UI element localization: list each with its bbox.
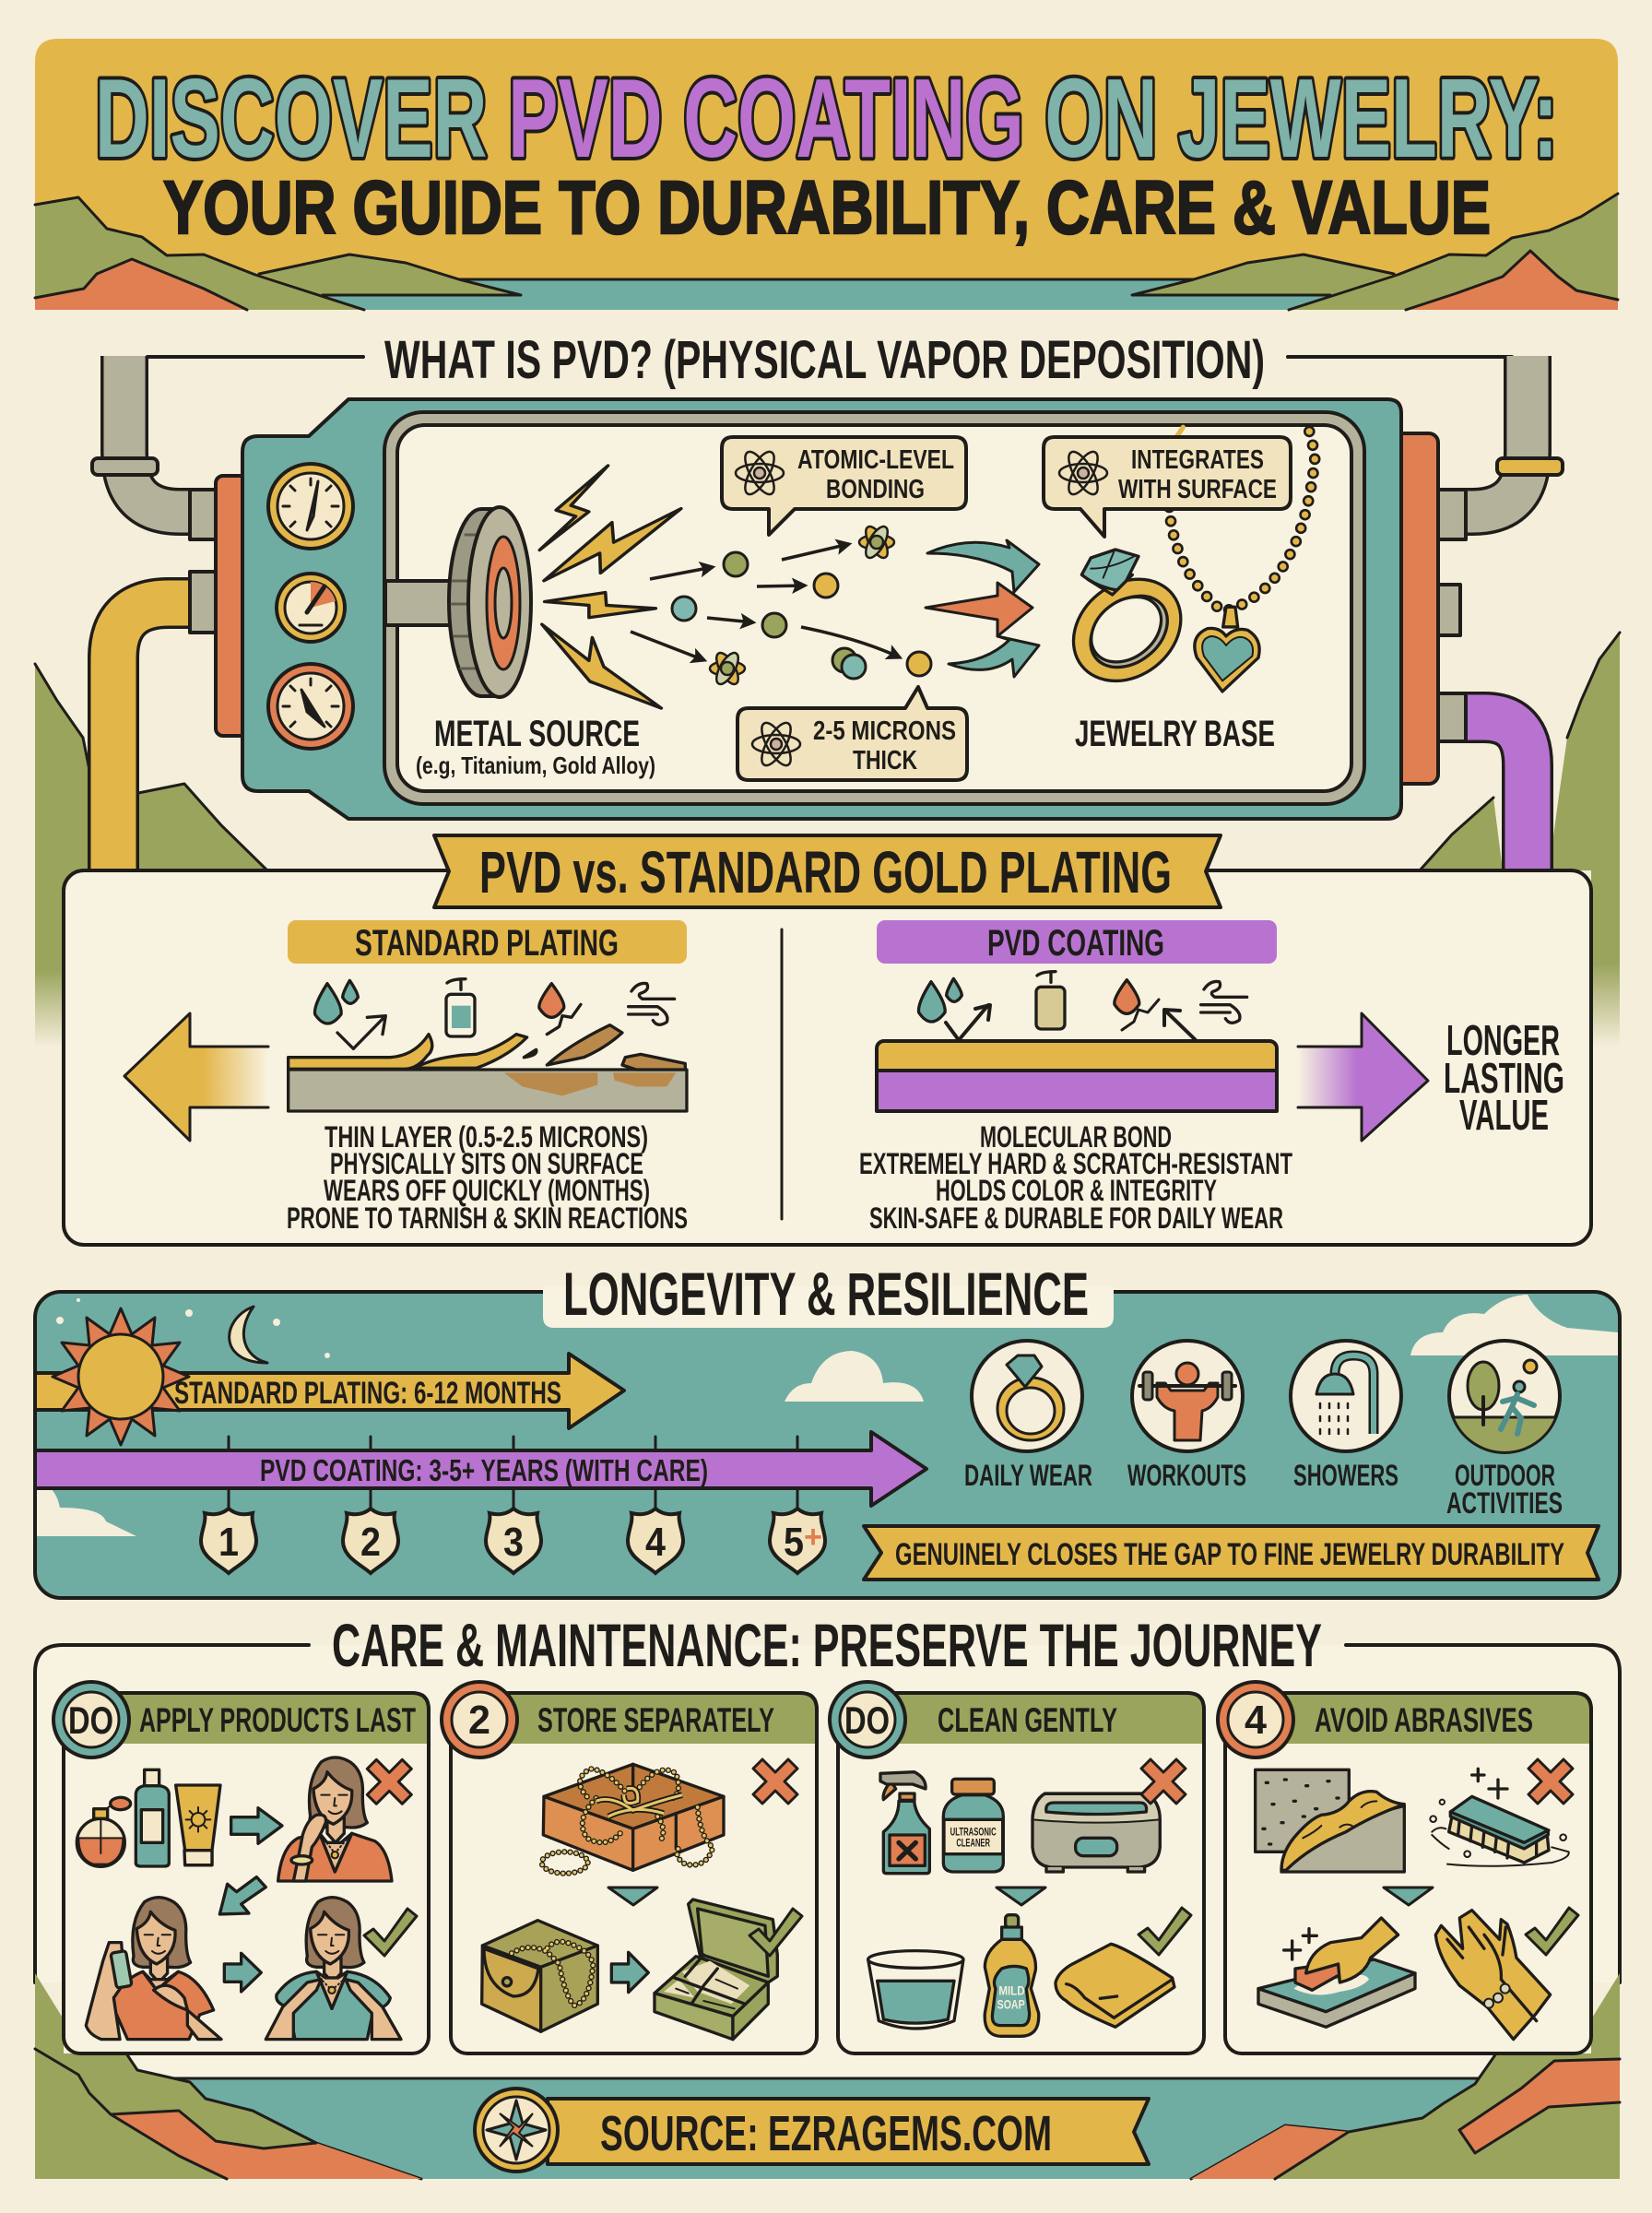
perfume bottle [77, 1797, 131, 1866]
source ribbon: SOURCE: EZRAGEMS.COM [600, 2106, 1052, 2161]
label: APPLY PRODUCTS LAST [139, 1701, 416, 1739]
gem ring [1054, 550, 1201, 702]
standard plating pill: STANDARD PLATING [355, 923, 619, 964]
left gray pipe [92, 356, 218, 512]
badge: DO [68, 1698, 113, 1742]
gauge 1 [268, 464, 353, 549]
longer lasting value [1444, 1016, 1564, 1139]
callout: atomic-level bonding [722, 437, 966, 535]
PVD exposure icons [918, 972, 1247, 1040]
lightning bolts [539, 466, 681, 708]
header band [1225, 1693, 1591, 1744]
jewelry base label: JEWELRY BASE [1075, 714, 1275, 754]
heading tab [543, 1260, 1114, 1328]
PVD coating list [859, 1120, 1292, 1235]
glass of water [868, 1951, 963, 2029]
badge [53, 1682, 129, 1757]
x mark [1141, 1759, 1186, 1804]
standard plating list: PRONE TO TARNISH & SKIN REACTIONS [287, 1201, 688, 1235]
cleaning cloth [1056, 1944, 1174, 2027]
icon labels [964, 1459, 1563, 1520]
bottom landscape [35, 1973, 1620, 2179]
mild soap bottle: MILD [998, 1982, 1025, 1997]
gauge 2 [277, 574, 345, 642]
card 4: avoid abrasives [1218, 1682, 1591, 2053]
triangle pointer [1384, 1888, 1433, 1905]
card 1: apply products last [53, 1682, 429, 2053]
pouch [482, 1921, 597, 2031]
compartment jewelry box [655, 1899, 777, 2040]
badge [1218, 1682, 1293, 1757]
sun [53, 1308, 189, 1445]
callout: integrates with surface: WITH SURFACE [1118, 475, 1277, 504]
left fading arrow [124, 1013, 268, 1141]
standard plating timeline arrow [35, 1354, 624, 1428]
ultrasonic machine [1032, 1793, 1160, 1872]
longer lasting value: LASTING [1444, 1054, 1564, 1102]
gloved hand [1306, 1918, 1398, 1982]
card 3: clean gently [830, 1682, 1204, 2053]
card 2: store separately [442, 1682, 817, 2053]
spray bottle [136, 1769, 169, 1866]
badge [830, 1682, 905, 1757]
yellow pipe [113, 603, 218, 872]
ribbon heading: PVD vs. STANDARD GOLD PLATING [479, 839, 1172, 905]
particle stream [631, 524, 931, 687]
callout: atomic-level bonding: ATOMIC-LEVEL [797, 445, 954, 475]
standard layer diagram [289, 1025, 687, 1111]
standard plating list: THIN LAYER (0.5-2.5 MICRONS) [324, 1120, 648, 1154]
sparkles [1284, 1929, 1316, 1959]
icon labels: WORKOUTS [1127, 1459, 1246, 1492]
ultrasonic cleaner bottle: ULTRASONIC [950, 1826, 997, 1839]
necklace [1169, 427, 1316, 692]
year shields: 1 [218, 1520, 239, 1565]
header banner [35, 39, 1618, 310]
heading tab: LONGEVITY & RESILIENCE [563, 1260, 1089, 1328]
PVD layer diagram [877, 1041, 1277, 1111]
heart pendant [1195, 607, 1259, 692]
label: CLEAN GENTLY [938, 1701, 1117, 1739]
icon labels: OUTDOOR [1455, 1459, 1555, 1492]
mild soap bottle: SOAP [997, 1996, 1025, 2011]
ribbon heading [434, 835, 1221, 907]
check mark [364, 1909, 417, 1956]
PVD coating list: SKIN-SAFE & DURABLE FOR DAILY WEAR [869, 1201, 1283, 1235]
arrow [224, 1953, 261, 1992]
year shields: 3 [503, 1520, 524, 1565]
year shields: + [804, 1520, 822, 1555]
PVD coating pill [877, 920, 1277, 964]
illustrations [1256, 1769, 1569, 2040]
check mark [1139, 1908, 1191, 1955]
icon labels: ACTIVITIES [1446, 1486, 1563, 1520]
year shields: 5 [784, 1520, 804, 1565]
check mark [749, 1909, 802, 1956]
arrow [231, 1808, 282, 1843]
woman: fastening necklace [266, 1898, 401, 2040]
standard exposure icons [314, 979, 675, 1048]
metal source sublabel: (e.g, Titanium, Gold Alloy) [416, 751, 655, 779]
standard plating list [287, 1120, 688, 1235]
woman: spraying [86, 1898, 221, 2040]
header water [313, 279, 1337, 310]
icon: daily wear ring [972, 1341, 1082, 1451]
standard timeline label: STANDARD PLATING: 6-12 MONTHS [174, 1376, 561, 1411]
callout: 2-5 microns thick: 2-5 MICRONS [813, 716, 956, 746]
callout: 2-5 microns thick [738, 687, 967, 780]
metal source label: METAL SOURCE [434, 714, 640, 754]
band outline [64, 1693, 429, 1744]
badge: 4 [1245, 1698, 1268, 1743]
right fading arrow [1298, 1013, 1428, 1141]
callout: integrates with surface: INTEGRATES [1131, 445, 1264, 475]
durability ribbon [864, 1526, 1599, 1580]
big flow arrows [926, 540, 1039, 677]
badge: DO [844, 1698, 890, 1742]
header right mountains [1132, 194, 1618, 310]
water line [126, 2077, 1484, 2080]
triangle pointer [997, 1888, 1045, 1905]
PVD coating list: EXTREMELY HARD & SCRATCH-RESISTANT [859, 1147, 1292, 1180]
header band [838, 1693, 1204, 1744]
illustrations [77, 1757, 411, 2040]
ultrasonic cleaner bottle [943, 1779, 1003, 1872]
icon: compass [475, 2089, 558, 2172]
longer lasting value: LONGER [1446, 1016, 1560, 1064]
section heading: what is PVD: WHAT IS PVD? (PHYSICAL VAPOR DEPOSITION) [384, 330, 1265, 390]
label: STORE SEPARATELY [537, 1701, 774, 1739]
spray cleaner [880, 1772, 929, 1874]
header band [64, 1693, 429, 1744]
arrow [611, 1952, 648, 1993]
icon: outdoor activities [1449, 1341, 1560, 1452]
icon labels: SHOWERS [1293, 1459, 1398, 1492]
callout: integrates with surface [1044, 437, 1291, 537]
panel: PVD vs standard plating [64, 835, 1591, 1245]
clouds [37, 1295, 1618, 1536]
band outline [838, 1693, 1204, 1744]
header band [451, 1693, 817, 1744]
badge: 2 [468, 1698, 490, 1743]
PVD coating list: MOLECULAR BOND [980, 1120, 1172, 1154]
year ticks [229, 1437, 797, 1512]
sunscreen tube [176, 1785, 220, 1865]
machine side tanks [190, 433, 1466, 784]
x mark [367, 1759, 411, 1804]
metal source target [385, 507, 531, 697]
mild soap bottle [985, 1915, 1039, 2036]
band outline [1225, 1693, 1591, 1744]
stars [56, 1298, 330, 1358]
year shields: 4 [645, 1520, 666, 1565]
abrasive pad and cloth [1256, 1769, 1404, 1872]
care frame outline [35, 1645, 1620, 1982]
PVD coating list: HOLDS COLOR & INTEGRITY [936, 1174, 1217, 1207]
standard plating list: WEARS OFF QUICKLY (MONTHS) [324, 1174, 650, 1207]
band outline [451, 1693, 817, 1744]
vacuum chamber body [242, 399, 1401, 819]
callout: atomic-level bonding: BONDING [826, 475, 925, 504]
water lines [459, 278, 1194, 280]
scrub brush [1430, 1769, 1569, 1866]
gauge 3 [268, 664, 353, 749]
illustrations [482, 1764, 777, 2040]
illustrations [868, 1772, 1174, 2036]
chamber window [384, 412, 1364, 804]
x mark [753, 1759, 797, 1804]
woman: touching face [278, 1757, 392, 1881]
source ribbon [548, 2099, 1149, 2164]
icon: showers [1291, 1341, 1401, 1451]
icon labels: DAILY WEAR [964, 1459, 1092, 1492]
tangled jewelry box [542, 1764, 724, 1874]
check mark [1526, 1908, 1578, 1955]
diagonal arrow [219, 1877, 266, 1914]
year shields [201, 1509, 825, 1573]
PVD timeline arrow [35, 1432, 926, 1506]
right gray pipe [1438, 356, 1563, 512]
panel: care and maintenance frame [35, 1645, 1620, 2084]
ultrasonic cleaner bottle: CLEANER [956, 1837, 990, 1850]
left terrain [35, 1973, 421, 2179]
right terrain [1191, 1973, 1620, 2179]
PVD timeline label: PVD COATING: 3-5+ YEARS (WITH CARE) [260, 1453, 708, 1487]
longer lasting value: VALUE [1459, 1091, 1549, 1139]
pipes [92, 356, 1563, 872]
right side mountains [1420, 633, 1620, 1047]
moon [230, 1307, 267, 1363]
divider [780, 929, 784, 1219]
triangle pointer [608, 1888, 657, 1905]
soft sponge [1258, 1959, 1415, 2027]
x mark [1528, 1759, 1573, 1804]
year shields: 2 [360, 1520, 381, 1565]
PVD coating pill: PVD COATING [987, 923, 1164, 964]
purple pipe [1461, 717, 1528, 872]
panel: longevity and resilience [35, 1260, 1620, 1598]
header left mountains [35, 197, 521, 310]
badge [442, 1682, 517, 1757]
heading leader lines [148, 355, 1512, 359]
icon: workouts [1132, 1341, 1243, 1451]
callout: 2-5 microns thick: THICK [853, 746, 917, 775]
rubber gloves [1435, 1911, 1551, 2040]
left side mountains [35, 664, 267, 1047]
label: AVOID ABRASIVES [1315, 1701, 1533, 1739]
standard plating list: PHYSICALLY SITS ON SURFACE [330, 1147, 643, 1180]
